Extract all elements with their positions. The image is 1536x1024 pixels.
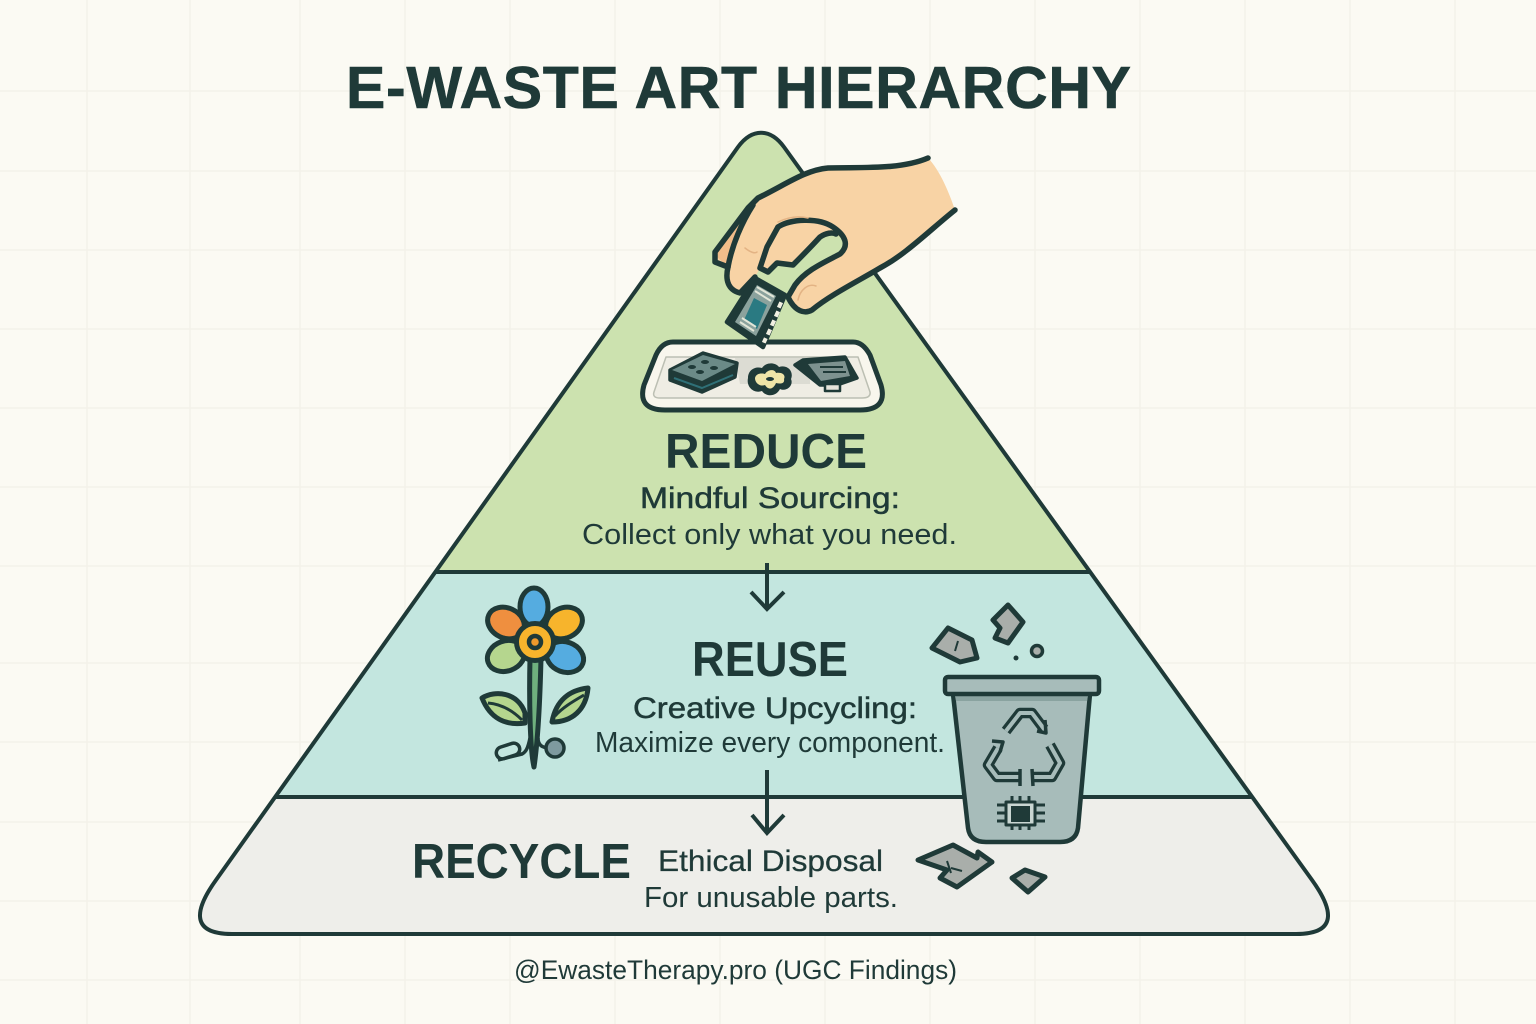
heading: reduce: REDUCE — [665, 425, 867, 479]
icon: microchip — [997, 796, 1045, 830]
pyramid — [198, 130, 1330, 936]
text: mindful sourcing — [582, 482, 957, 551]
icon: falling shards — [918, 605, 1045, 892]
icon: recycling bin — [945, 677, 1099, 842]
icon: tray of components — [643, 342, 882, 410]
text: creative upcycling: Maximize every component. — [595, 727, 945, 759]
icon: hand — [715, 158, 955, 312]
text: ethical disposal: Ethical Disposal — [658, 845, 883, 878]
text: ethical disposal — [644, 845, 898, 914]
arrow: reuse to recycle — [752, 770, 784, 833]
text: creative upcycling — [595, 692, 945, 759]
icon: recycle symbol — [988, 713, 1060, 786]
title: E-WASTE ART HIERARCHY — [346, 55, 1131, 121]
text: mindful sourcing: Collect only what you need. — [582, 519, 957, 551]
text: creative upcycling: Creative Upcycling: — [633, 692, 917, 725]
text: mindful sourcing: Mindful Sourcing: — [640, 482, 900, 515]
icon: circuit chip in hand — [727, 278, 785, 347]
icon: flower — [482, 588, 588, 767]
arrow: reduce to reuse — [751, 563, 784, 609]
footer credit: @EwasteTherapy.pro (UGC Findings) — [514, 955, 957, 985]
heading: recycle: RECYCLE — [412, 835, 631, 889]
heading: reuse: REUSE — [692, 633, 848, 687]
text: ethical disposal: For unusable parts. — [644, 882, 898, 914]
